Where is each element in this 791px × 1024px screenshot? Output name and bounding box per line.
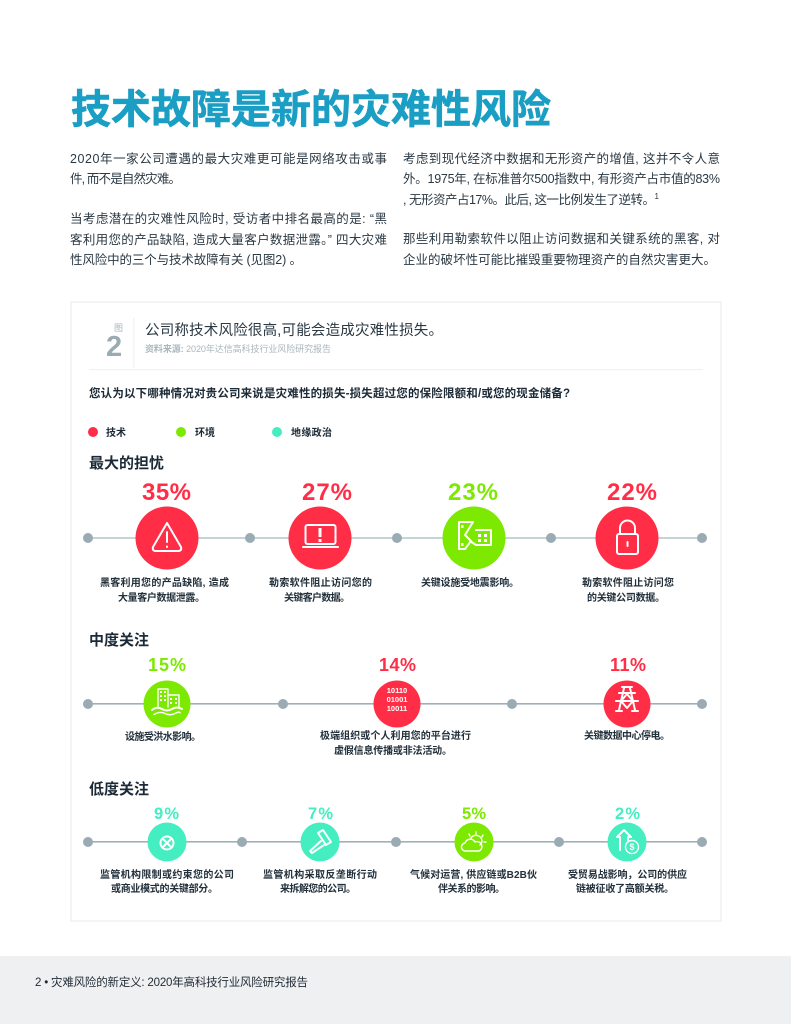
item: 14%: 极端组织或个人利用您的平台进行 (320, 729, 471, 742)
item: 14%: 虚假信息传播或非法活动。 (334, 744, 452, 757)
item: 5% (410, 805, 537, 895)
item: 2%: $ (629, 842, 635, 852)
item: 11%: 关键数据中心停电。 (584, 729, 670, 742)
text block: left column: 当考虑潜在的灾难性风险时, 受访者中排名最高的是: “黑 (70, 211, 387, 226)
item: 5%: 伴关系的影响。 (438, 882, 505, 895)
item: 9% (100, 805, 234, 895)
legend: 地缘政治 (291, 426, 332, 439)
source: 资料来源: 2020年达信高科技行业风险研究报告 (145, 343, 331, 354)
figure heading: 公司称技术风险很高,可能会造成灾难性损失。 (145, 322, 443, 339)
panel: figure 2 (71, 302, 721, 921)
item: 22%: 的关键公司数据。 (587, 591, 665, 604)
item: 9%: 9% (154, 805, 179, 823)
timeline: row 2 (83, 699, 707, 709)
footer band (0, 956, 791, 1024)
text block: right column: 那些利用勒索软件以阻止访问数据和关键系统的黑客, 对 (403, 231, 720, 246)
item: 9%: 监管机构限制或约束您的公司 (100, 868, 234, 881)
item: 27% (269, 479, 372, 604)
text block: left column: 性风险中的三个与技术故障有关 (见图2) 。 (70, 252, 302, 267)
item: 35%: 大量客户数据泄露。 (118, 591, 205, 604)
item: 2%: 受贸易战影响，公司的供应 (568, 868, 687, 881)
text block: right column: 1 (655, 192, 660, 201)
legend: 环境 (195, 426, 215, 439)
figure number: 2 (106, 331, 122, 363)
text block: right column (403, 151, 720, 267)
item: 11% (584, 655, 670, 742)
item: 2%: 链被征收了高额关税。 (576, 882, 674, 895)
item: 23% (421, 479, 519, 589)
item: 14%: 14% (379, 655, 416, 675)
heading: biggest concerns: 最大的担忧 (89, 454, 164, 472)
item: 22%: 22% (607, 479, 657, 506)
item: 2% (568, 805, 687, 895)
survey question: 您认为以下哪种情况对贵公司来说是灾难性的损失-损失超过您的保险限额和/或您的现金储备? (89, 386, 570, 400)
text block: left column: 2020年一家公司遭遇的最大灾难更可能是网络攻击或事 (70, 151, 387, 166)
timeline: row 1 (83, 533, 707, 543)
item: 35% (100, 479, 229, 604)
footer text: 2 • 灾难风险的新定义: 2020年高科技行业风险研究报告 (35, 975, 308, 989)
text block: right column: 外。1975年, 在标准普尔500指数中, 有形资产占市值的83% (403, 171, 720, 186)
heading: low concerns: 低度关注 (89, 780, 149, 798)
item: 27%: 关键客户数据。 (284, 591, 350, 604)
text block: right column: 企业的破坏性可能比摧毁重要物理资产的自然灾害更大。 (403, 252, 716, 267)
item: 14%: 01001 (387, 695, 407, 704)
item: 23%: 关键设施受地震影响。 (421, 576, 519, 589)
item: 15%: 设施受洪水影响。 (125, 730, 201, 743)
item: 27%: 勒索软件阻止访问您的 (269, 576, 372, 589)
item: 35%: 35% (142, 479, 191, 506)
item: 35%: 黑客利用您的产品缺陷, 造成 (100, 576, 229, 589)
item: 15%: 15% (148, 655, 186, 675)
item: 27%: 27% (302, 479, 352, 506)
figure number: 图 (114, 323, 123, 333)
item: 14%: 10110 (387, 686, 407, 695)
text block: left column: 客利用您的产品缺陷, 造成大量客户数据泄露。” 四大灾难 (70, 232, 387, 247)
item: 7%: 监管机构采取反垄断行动 (263, 868, 377, 881)
item: 11%: 11% (610, 655, 646, 675)
item: 14% (320, 655, 471, 757)
item: 2%: 2% (615, 805, 640, 823)
title: 技术故障是新的灾难性风险 (71, 88, 551, 132)
timeline: row 3 (83, 837, 707, 847)
item: 23%: 23% (448, 479, 498, 506)
item: 7% (263, 805, 377, 895)
item: 5%: 气候对运营, 供应链或B2B伙 (410, 868, 537, 881)
item: 7%: 来拆解您的公司。 (280, 882, 356, 895)
text block: left column: 件, 而不是自然灾难。 (70, 171, 181, 186)
text block: left column (70, 151, 387, 267)
item: 9%: 或商业模式的关键部分。 (111, 882, 218, 895)
legend: 技术 (106, 426, 126, 439)
item: 14%: 10011 (387, 704, 407, 713)
text block: right column: , 无形资产占17%。此后, 这一比例发生了逆转。 (403, 193, 655, 207)
item: 22%: 勒索软件阻止访问您 (582, 576, 674, 589)
item: 22% (582, 479, 674, 604)
legend (88, 426, 332, 439)
item: 5%: 5% (462, 805, 486, 823)
heading: moderate concerns: 中度关注 (89, 631, 149, 649)
text block: right column: 考虑到现代经济中数据和无形资产的增值, 这并不令人意 (403, 151, 720, 166)
item: 15% (125, 655, 201, 743)
item: 7%: 7% (308, 805, 333, 823)
